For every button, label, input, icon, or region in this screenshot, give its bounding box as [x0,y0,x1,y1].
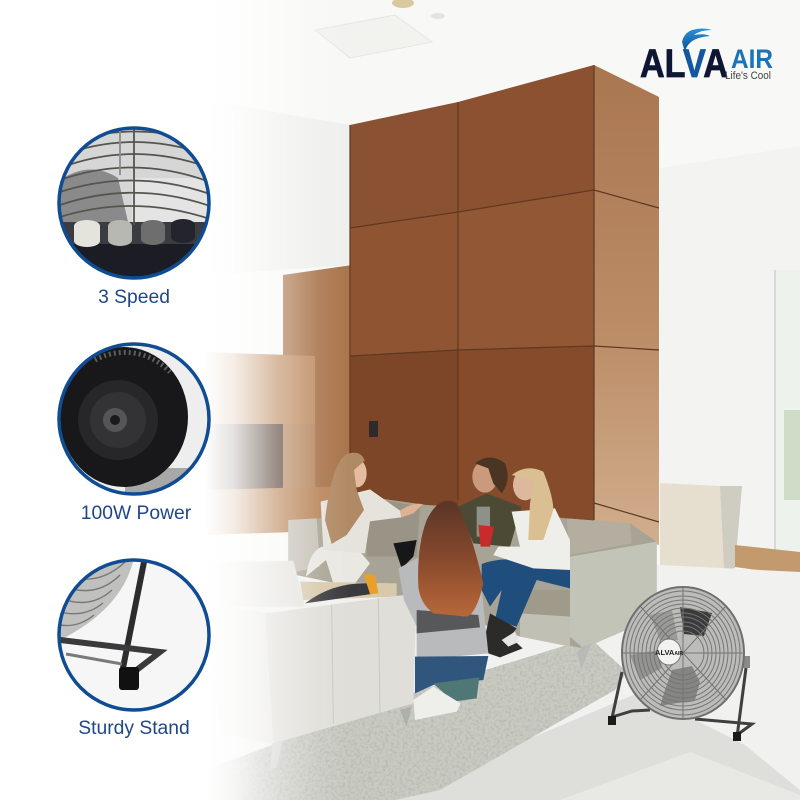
left sofa [207,561,417,768]
ceiling and walls [200,0,800,800]
coffee table and glass [300,573,397,603]
product fan [608,587,752,741]
room scene photo [200,0,800,800]
feature: Sturdy Stand [55,555,215,739]
rug [205,638,627,800]
logo: Alva Air [640,28,773,86]
label: Sturdy Stand [78,718,190,739]
floor [205,560,800,800]
fan grille and blades: ALVAAIR [655,648,683,657]
circle photo: stand [55,555,215,715]
people and sofas [207,453,657,768]
man in olive jacket [393,457,522,568]
logo wordmark: ALVA [640,42,728,86]
window and stacked panels on right [660,270,800,576]
blonde woman with red cup [478,468,570,657]
fan grille and blades [622,587,744,719]
wood column [350,65,659,545]
feature: 3 Speed [55,125,215,308]
woman seated on rug, seen from behind [398,501,488,720]
logo swoosh [682,28,712,52]
right sofa [288,497,657,668]
circle photo: motor [57,342,211,496]
lower wood wall [205,265,352,535]
circle photo: speed buttons [55,125,215,285]
woman on left of sofa [306,453,423,583]
logo: Alva Air: AIR [731,44,773,74]
logo tagline: Life's Cool [725,70,771,82]
label: 100W Power [81,503,192,524]
buttons [74,220,100,247]
white fade over left of photo [200,0,360,800]
feature: 100W Power [57,342,211,519]
label: 3 Speed [98,287,170,308]
fan stand [612,668,752,737]
